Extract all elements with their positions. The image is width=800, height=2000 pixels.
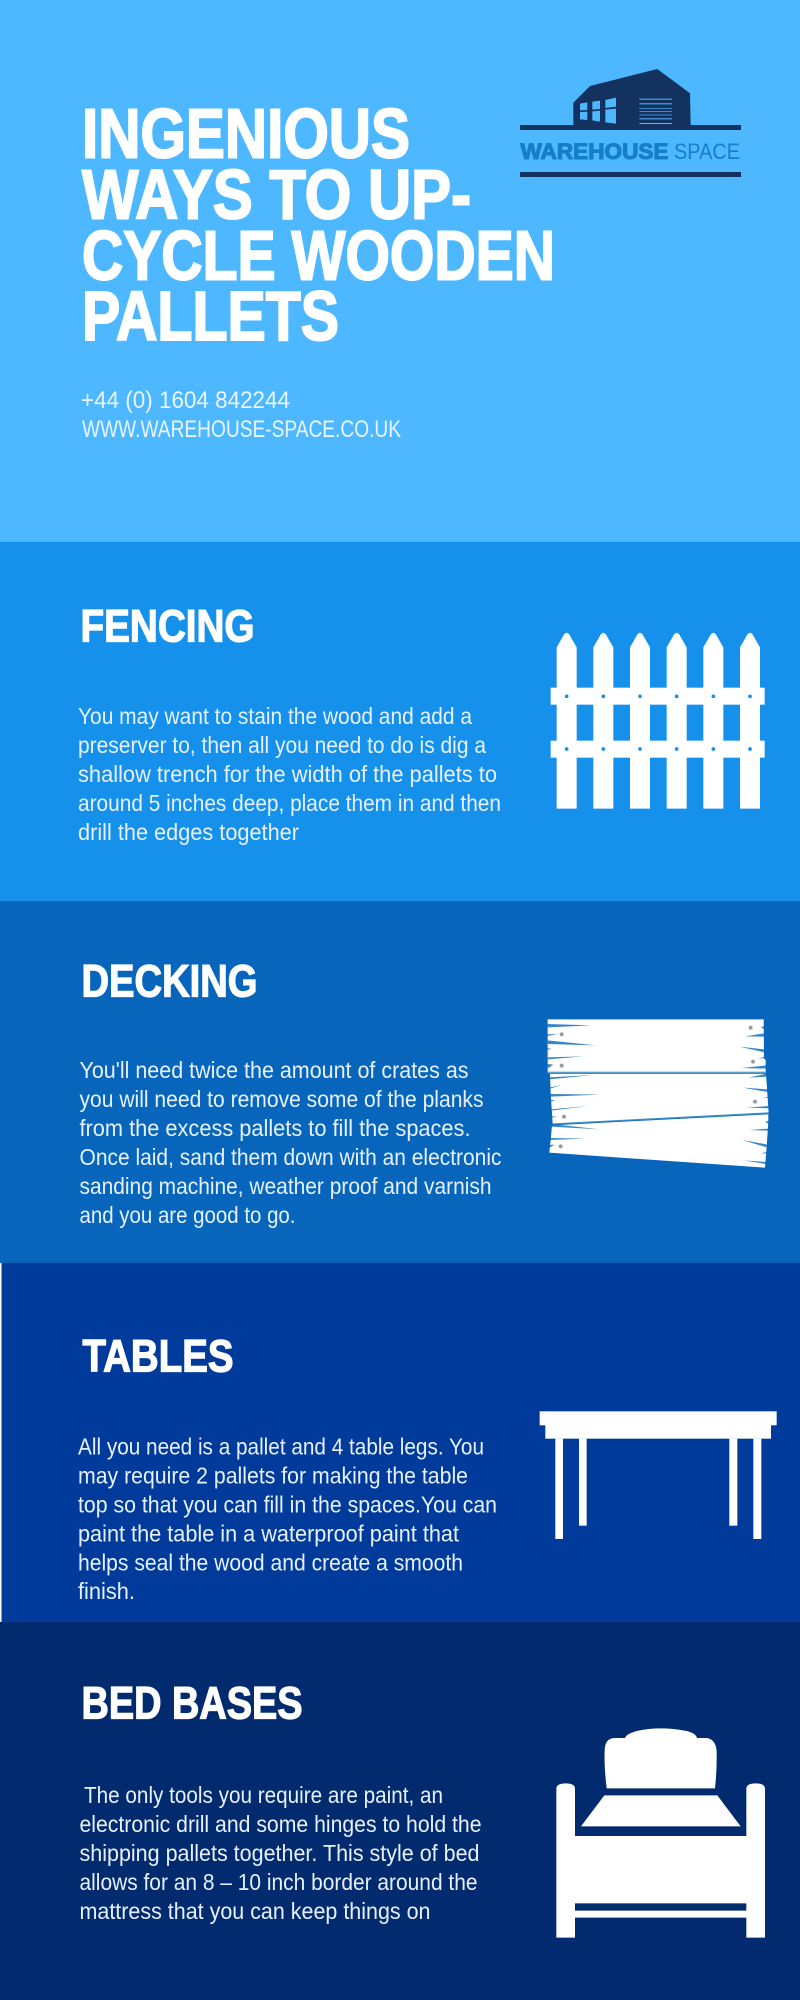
- logo: warehouse space: WAREHOUSE: [520, 139, 668, 164]
- panel: decking: [0, 901, 800, 1263]
- title: WAYS TO UP-: [82, 156, 471, 234]
- text: fencing: shallow trench for the width of the pallets to: [78, 761, 497, 787]
- text: fencing: around 5 inches deep, place them in and then: [78, 790, 501, 816]
- logo: warehouse space: SPACE: [674, 139, 740, 164]
- text: bed bases: electronic drill and some hinges to hold the: [80, 1811, 482, 1837]
- text: tables: may require 2 pallets for making the table: [78, 1462, 468, 1488]
- text: decking: You'll need twice the amount of crates as: [80, 1057, 468, 1083]
- contact details: [81, 387, 401, 443]
- text: tables: [78, 1434, 497, 1604]
- title: [82, 94, 555, 355]
- text: tables: All you need is a pallet and 4 table legs. You: [78, 1434, 484, 1460]
- text: bed bases: [80, 1782, 482, 1924]
- text: fencing: [78, 703, 501, 845]
- text: fencing: preserver to, then all you need to do is dig a: [78, 732, 486, 758]
- text: decking: Once laid, sand them down with an electronic: [80, 1144, 502, 1170]
- text: bed bases: shipping pallets together. This style of bed: [80, 1840, 480, 1866]
- panel: tables: [0, 1263, 800, 1622]
- text: tables: paint the table in a waterproof paint that: [78, 1520, 460, 1546]
- text: tables: finish.: [78, 1578, 135, 1604]
- heading: tables: TABLES: [82, 1330, 234, 1382]
- title: CYCLE WOODEN: [82, 216, 555, 294]
- text: bed bases: mattress that you can keep things on: [80, 1898, 430, 1924]
- title: INGENIOUS: [82, 94, 410, 172]
- text: decking: and you are good to go.: [80, 1202, 296, 1228]
- text: tables: helps seal the wood and create a smooth: [78, 1550, 463, 1576]
- text: decking: sanding machine, weather proof and varnish: [80, 1173, 492, 1199]
- contact details: +44 (0) 1604 842244: [81, 387, 290, 414]
- text: tables: top so that you can fill in the spaces.You can: [78, 1492, 497, 1518]
- icon: picket fence: [551, 633, 765, 809]
- text: fencing: drill the edges together: [78, 819, 299, 845]
- text: bed bases: allows for an 8 – 10 inch border around the: [80, 1869, 478, 1895]
- panel: fencing: [0, 542, 800, 901]
- heading: fencing: FENCING: [80, 600, 254, 652]
- icon: bed: [556, 1728, 765, 1938]
- contact details: WWW.WAREHOUSE-SPACE.CO.UK: [82, 416, 401, 443]
- heading: bed bases: BED BASES: [82, 1678, 302, 1728]
- icon: table: [540, 1411, 777, 1539]
- panel: header: [0, 0, 800, 542]
- title: PALLETS: [82, 277, 339, 355]
- text: decking: [80, 1057, 502, 1228]
- panel: bed bases: [0, 1622, 800, 2000]
- icon: deck planks: [548, 1019, 769, 1168]
- text: fencing: You may want to stain the wood and add a: [78, 703, 472, 729]
- text: bed bases: The only tools you require are paint, an: [84, 1782, 443, 1808]
- logo: warehouse space: [520, 69, 741, 177]
- text: decking: you will need to remove some of the planks: [80, 1086, 484, 1112]
- text: decking: from the excess pallets to fill the spaces.: [80, 1115, 470, 1141]
- heading: decking: DECKING: [82, 956, 258, 1006]
